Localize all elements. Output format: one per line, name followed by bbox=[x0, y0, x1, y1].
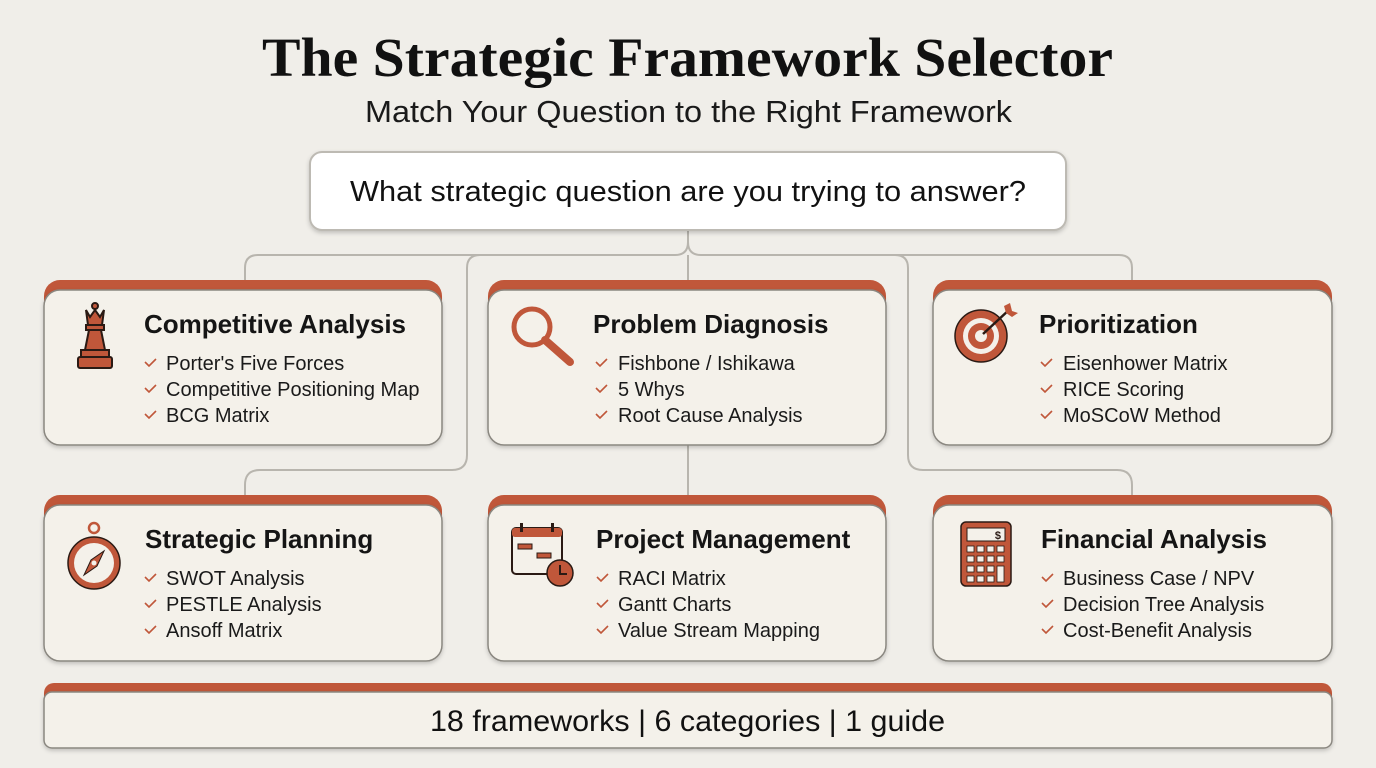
panel: Problem Diagnosis: 5 Whys bbox=[618, 379, 685, 401]
panel: Financial Analysis: Business Case / NPV bbox=[1063, 568, 1255, 590]
question box bbox=[310, 152, 1066, 230]
icon: calendar clock bbox=[512, 523, 573, 586]
panel: Problem Diagnosis: Fishbone / Ishikawa bbox=[618, 353, 796, 375]
panel: Strategic Planning: Ansoff Matrix bbox=[166, 620, 282, 642]
panel: Financial Analysis: Cost-Benefit Analysis bbox=[1063, 620, 1252, 642]
panel: Prioritization: RICE Scoring bbox=[1063, 379, 1184, 401]
panel: Prioritization: Eisenhower Matrix bbox=[1063, 353, 1228, 375]
panel: Competitive Analysis: Competitive Analysis bbox=[144, 309, 406, 339]
panel: Prioritization: Prioritization bbox=[1039, 309, 1198, 339]
connector lines bbox=[245, 230, 1132, 497]
question box: What strategic question are you trying to answer? bbox=[350, 176, 1026, 208]
panel: Problem Diagnosis: Problem Diagnosis bbox=[593, 309, 828, 339]
panel: Competitive Analysis: BCG Matrix bbox=[166, 405, 269, 427]
icon: chess queen bbox=[78, 303, 112, 368]
panel: Strategic Planning: SWOT Analysis bbox=[166, 568, 305, 590]
panel: Prioritization: MoSCoW Method bbox=[1063, 405, 1221, 427]
title: The Strategic Framework Selector bbox=[262, 27, 1113, 88]
panel: Financial Analysis bbox=[933, 495, 1332, 661]
panel: Financial Analysis: Financial Analysis bbox=[1041, 524, 1267, 554]
panel: Competitive Analysis: Competitive Positioning Map bbox=[166, 379, 419, 401]
icon: target bbox=[955, 303, 1018, 362]
panel: Strategic Planning: Strategic Planning bbox=[145, 524, 373, 554]
icon: calculator bbox=[961, 522, 1011, 586]
panel: Project Management: Value Stream Mapping bbox=[618, 620, 820, 642]
panel: Competitive Analysis bbox=[44, 280, 442, 445]
panel: Strategic Planning bbox=[44, 495, 442, 661]
panel: Competitive Analysis: Porter's Five Forces bbox=[166, 353, 344, 375]
footer banner: 18 frameworks | 6 categories | 1 guide bbox=[430, 705, 945, 738]
icon: compass bbox=[68, 523, 120, 589]
panel: Project Management: Gantt Charts bbox=[618, 594, 731, 616]
panel: Problem Diagnosis: Root Cause Analysis bbox=[618, 405, 803, 427]
panel: Project Management bbox=[488, 495, 886, 661]
footer banner bbox=[44, 683, 1332, 748]
icon: magnifier bbox=[514, 309, 570, 362]
panel: Project Management: RACI Matrix bbox=[618, 568, 726, 590]
subtitle: Match Your Question to the Right Framework bbox=[365, 94, 1013, 129]
panel: Project Management: Project Management bbox=[596, 524, 851, 554]
panel: Problem Diagnosis bbox=[488, 280, 886, 445]
panel: Strategic Planning: PESTLE Analysis bbox=[166, 594, 322, 616]
icon: calculator: $ bbox=[995, 530, 1001, 542]
panel: Prioritization bbox=[933, 280, 1332, 445]
panel: Financial Analysis: Decision Tree Analysis bbox=[1063, 594, 1264, 616]
